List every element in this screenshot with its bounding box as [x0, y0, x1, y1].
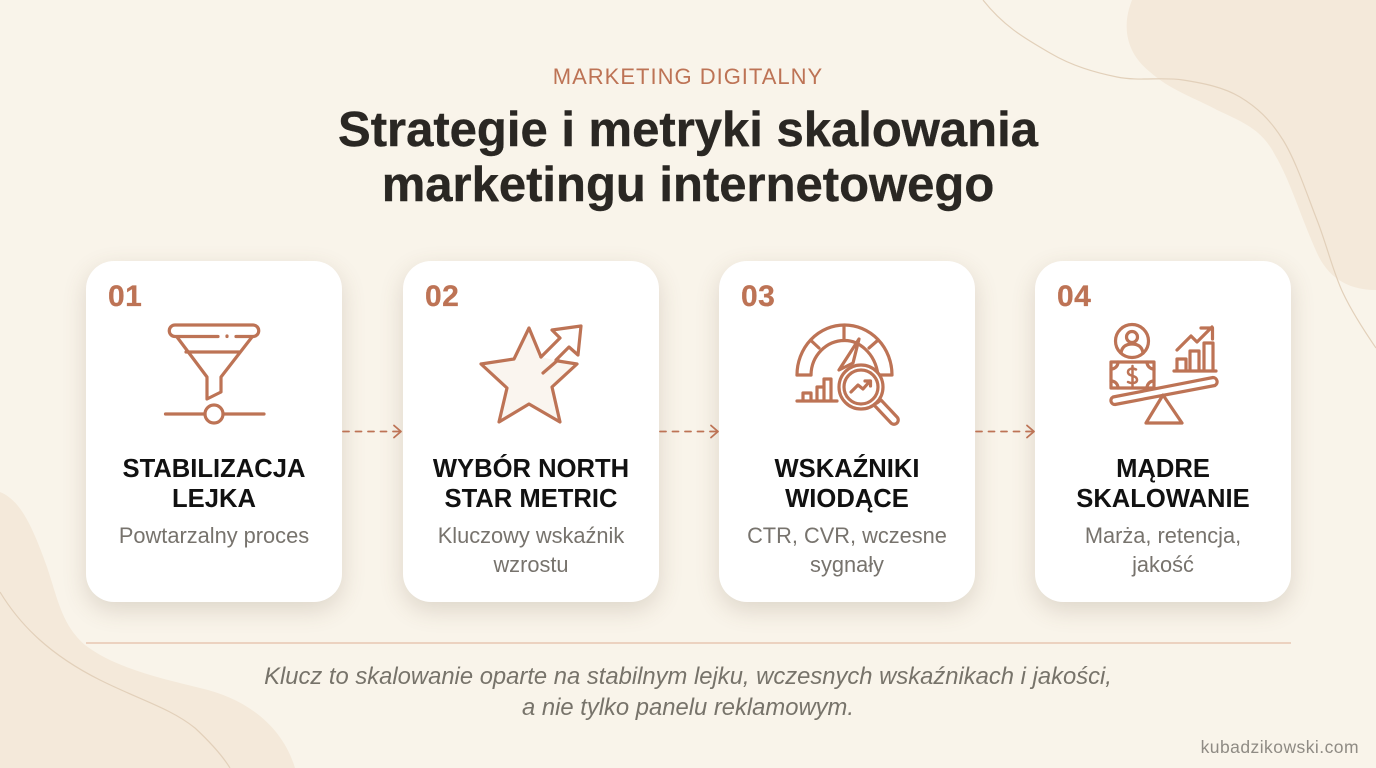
- number 02: 02: [425, 280, 459, 313]
- description: [1085, 523, 1241, 576]
- description: Marża, retencja,: [1085, 523, 1241, 548]
- icon: funnel: [166, 325, 264, 423]
- closing statement: [264, 663, 1112, 721]
- heading: [432, 454, 629, 513]
- arrow: card 1 to card 2: [343, 426, 401, 438]
- heading: MĄDRE: [1116, 455, 1210, 483]
- number 01: 01: [108, 280, 142, 313]
- eyebrow label: MARKETING DIGITALNY: [553, 64, 823, 89]
- heading: [1076, 455, 1250, 513]
- title: marketingu internetowego: [382, 158, 994, 212]
- description: [438, 523, 624, 576]
- heading: WYBÓR NORTH: [433, 455, 629, 483]
- description: sygnały: [810, 552, 884, 576]
- footer credit: kubadzikowski.com: [1201, 737, 1359, 757]
- heading: STAR METRIC: [444, 485, 617, 513]
- card 3: [719, 261, 975, 602]
- card 4: [1035, 261, 1291, 602]
- closing statement: a nie tylko panelu reklamowym.: [522, 694, 854, 721]
- heading: WSKAŹNIKI: [774, 455, 920, 483]
- description: Powtarzalny proces: [119, 523, 309, 548]
- description: [747, 523, 947, 576]
- card 1: [86, 261, 342, 602]
- heading: LEJKA: [172, 485, 256, 513]
- heading: [774, 454, 920, 513]
- arrow: card 2 to card 3: [660, 426, 718, 438]
- description: Kluczowy wskaźnik: [438, 523, 624, 548]
- heading: STABILIZACJA: [123, 455, 305, 483]
- number 03: 03: [741, 280, 775, 313]
- icon: gauge with magnifier: [797, 325, 898, 424]
- icon: balance with money and chart: [1111, 324, 1217, 423]
- heading: WIODĄCE: [785, 485, 909, 513]
- card 2: [403, 261, 659, 602]
- heading: SKALOWANIE: [1076, 485, 1250, 513]
- icon: star with arrow: [481, 326, 581, 422]
- arrow: card 3 to card 4: [976, 426, 1034, 438]
- description: CTR, CVR, wczesne: [747, 523, 947, 548]
- description: jakość: [1132, 552, 1194, 576]
- heading: [123, 455, 305, 513]
- title: [338, 103, 1038, 212]
- closing statement: Klucz to skalowanie oparte na stabilnym lejku, wczesnych wskaźnikach i jakości,: [264, 663, 1112, 690]
- description: wzrostu: [493, 552, 569, 576]
- number 04: 04: [1057, 280, 1091, 313]
- title: Strategie i metryki skalowania: [338, 103, 1038, 157]
